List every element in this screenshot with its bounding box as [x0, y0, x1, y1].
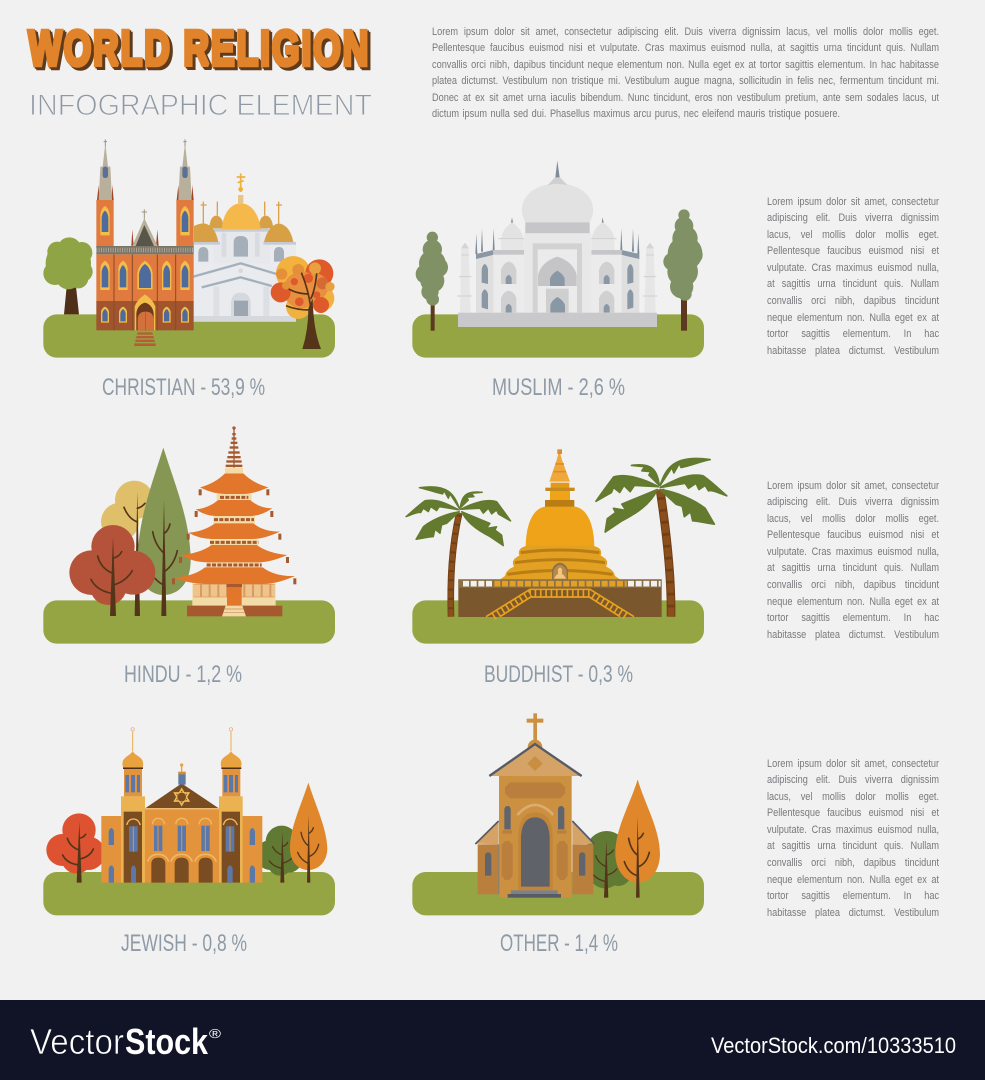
- text block: side two: habitasse platea dictumst. Vestibulum: [767, 629, 939, 641]
- panel: other: [412, 713, 704, 915]
- text block: side three: convallis orci nibh, dapibus tincidunt: [767, 857, 939, 869]
- tree: green cone: [138, 448, 191, 616]
- text block: side three: habitasse platea dictumst. Vestibulum: [767, 907, 939, 919]
- tree: red: [46, 813, 105, 883]
- text block: intro: convallis orci nibh, dapibus tincidunt neque elementum non. Nulla eget ex at tortor sagittis elementum. In hac habitasse: [432, 59, 939, 71]
- text block: side one: vulputate. Cras maximus euismod nulla,: [767, 262, 939, 274]
- text block: intro: [432, 26, 939, 120]
- stairs: [486, 589, 634, 617]
- text block: side three: Pellentesque faucibus euismod nisi et: [767, 807, 939, 819]
- label: jewish: JEWISH - 0,8 %: [121, 930, 247, 957]
- text block: intro: Donec at ex sit amet urna iaculis bibendum. Nunc tincidunt, eros non vestibulum pretium, ante sem sodales lacus, ut: [432, 92, 939, 104]
- text block: side two: adipiscing elit. Duis viverra dignissim: [767, 496, 939, 508]
- title: WORLD RELIGION: [30, 23, 370, 78]
- footer band: [0, 1000, 985, 1080]
- ground: [412, 872, 704, 915]
- text block: side one: at sagittis urna tincidunt quis. Nullam: [767, 278, 939, 290]
- text block: side one: habitasse platea dictumst. Vestibulum: [767, 345, 939, 357]
- ground: [412, 314, 704, 358]
- building: synagogue: [101, 728, 262, 883]
- label: hindu: HINDU - 1,2 %: [124, 661, 242, 688]
- text block: side one: Lorem ipsum dolor sit amet, consectetur: [767, 196, 939, 208]
- ground: [43, 872, 335, 915]
- text block: side two: at sagittis urna tincidunt quis. Nullam: [767, 562, 939, 574]
- label: buddhist: BUDDHIST - 0,3 %: [484, 661, 633, 688]
- label: christian: CHRISTIAN - 53,9 %: [102, 374, 265, 401]
- footer logo: ®: [209, 1026, 222, 1041]
- tree: right palm: [596, 458, 727, 617]
- tree: right cypress: [663, 209, 703, 331]
- icon: star of david: [175, 789, 189, 805]
- text block: side one: convallis orci nibh, dapibus tincidunt: [767, 295, 939, 307]
- tree: orange: [290, 783, 327, 883]
- text block: side two: Pellentesque faucibus euismod nisi et: [767, 529, 939, 541]
- building: taj mahal: [457, 161, 657, 327]
- label: other: OTHER - 1,4 %: [500, 930, 618, 957]
- building: pagoda: [172, 426, 296, 616]
- text block: side two: Lorem ipsum dolor sit amet, consectetur: [767, 480, 939, 492]
- panel: buddhist: [406, 449, 727, 644]
- panel: jewish: [43, 728, 335, 915]
- text block: side one: lacus, vel mollis dolor mollis eget.: [767, 229, 939, 241]
- text block: side one: Pellentesque faucibus euismod nisi et: [767, 245, 939, 257]
- text block: side three: adipiscing elit. Duis viverra dignissim: [767, 774, 939, 786]
- title: WORLD RELIGION: [31, 24, 371, 79]
- building: church: [475, 713, 595, 898]
- text block: intro: platea dictumst. Vestibulum non tristique mi. Vestibulum augue magna, sollicitudin in felis nec, fermentum tincidunt mi.: [432, 75, 939, 87]
- text block: side three: Lorem ipsum dolor sit amet, consectetur: [767, 758, 939, 770]
- text block: side three: [767, 758, 939, 919]
- text block: side three: tortor sagittis elementum. In hac: [767, 890, 939, 902]
- building: brick cathedral: [96, 139, 194, 346]
- icon: buddha niche: [552, 563, 568, 579]
- tree: green: [256, 826, 303, 883]
- footer logo: Stock: [125, 1021, 209, 1062]
- text block: side one: neque elementum non. Nulla eget ex at: [767, 312, 939, 324]
- ground: [43, 314, 335, 358]
- tree: yellow: [101, 481, 154, 616]
- tree: left palm: [406, 487, 511, 617]
- text block: side two: vulputate. Cras maximus euismod nulla,: [767, 546, 939, 558]
- text block: side three: at sagittis urna tincidunt quis. Nullam: [767, 840, 939, 852]
- footer url: VectorStock.com/10333510: [711, 1033, 956, 1058]
- text block: side one: tortor sagittis elementum. In hac: [767, 328, 939, 340]
- text block: side two: lacus, vel mollis dolor mollis eget.: [767, 513, 939, 525]
- text block: intro: dictum ipsum nulla sed dui. Phasellus maximus arcu purus, nec eleifend mauris tristique posuere.: [432, 108, 840, 120]
- title: WORLD RELIGION: [28, 21, 368, 76]
- tree: green: [586, 831, 631, 898]
- subtitle: INFOGRAPHIC ELEMENT: [29, 89, 372, 122]
- tree: autumn: [271, 256, 335, 349]
- text block: intro: Pellentesque faucibus euismod nisi et vulputate. Cras maximus euismod nulla, at sagittis urna tincidunt quis. Nullam: [432, 42, 939, 54]
- footer logo: [30, 1021, 222, 1062]
- panel: hindu: [43, 426, 335, 644]
- footer logo: Vector: [30, 1021, 124, 1062]
- tree: red: [69, 525, 155, 616]
- building: orthodox church: [193, 173, 296, 322]
- text block: intro: Lorem ipsum dolor sit amet, consectetur adipiscing elit. Duis viverra dignissim lacus, vel mollis dolor mollis eget.: [432, 26, 939, 38]
- text block: side three: vulputate. Cras maximus euismod nulla,: [767, 824, 939, 836]
- ground: [412, 600, 704, 644]
- panel: muslim: [412, 161, 704, 358]
- text block: side one: adipiscing elit. Duis viverra dignissim: [767, 212, 939, 224]
- panel: christian: [43, 139, 335, 358]
- building: stupa: [458, 449, 662, 617]
- text block: side one: [767, 196, 939, 357]
- text block: side two: neque elementum non. Nulla eget ex at: [767, 596, 939, 608]
- ground: [43, 600, 335, 644]
- tree: orange: [615, 779, 660, 898]
- text block: side three: lacus, vel mollis dolor mollis eget.: [767, 791, 939, 803]
- tree: left cypress: [416, 232, 448, 331]
- tree: green: [43, 237, 93, 314]
- label: muslim: MUSLIM - 2,6 %: [492, 374, 625, 401]
- text block: side two: tortor sagittis elementum. In hac: [767, 612, 939, 624]
- text block: side two: convallis orci nibh, dapibus tincidunt: [767, 579, 939, 591]
- text block: side three: neque elementum non. Nulla eget ex at: [767, 874, 939, 886]
- text block: side two: [767, 480, 939, 641]
